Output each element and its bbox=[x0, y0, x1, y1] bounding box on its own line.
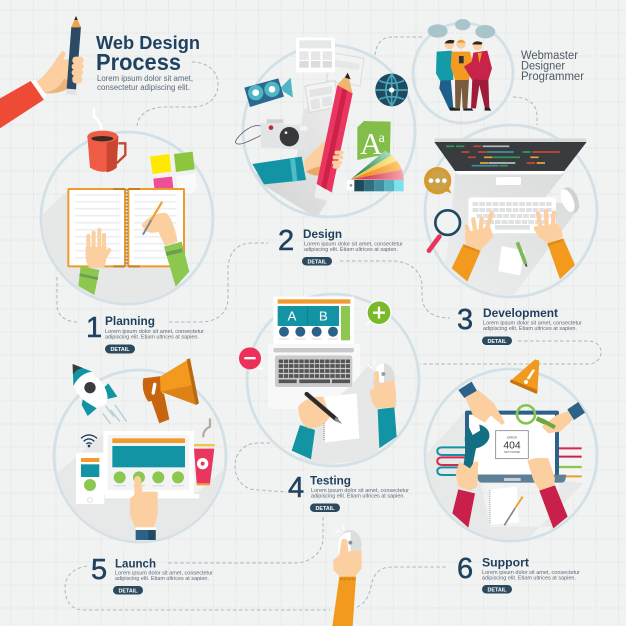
team labels: Programmer bbox=[521, 71, 584, 83]
hand holding big pencil bbox=[252, 73, 353, 202]
label: step 4 testing: adipiscing elit. Etiam ultrices at sapien. bbox=[311, 494, 405, 500]
title: Process bbox=[96, 49, 181, 75]
label: step 6 support: 6 bbox=[457, 553, 473, 585]
right hand with pen bbox=[142, 203, 189, 287]
notebook bbox=[68, 189, 184, 266]
label: step 5 launch: Launch bbox=[115, 556, 156, 570]
label: step 1 planning: DETAIL bbox=[110, 347, 130, 353]
icon: drink cup bbox=[194, 418, 215, 485]
panel: team bbox=[413, 19, 584, 123]
icon: minus bubble bbox=[239, 347, 263, 370]
panel: support illustration bbox=[425, 359, 597, 547]
icon: colour swatch fan bbox=[347, 151, 404, 191]
panel: design illustration bbox=[235, 37, 415, 218]
label: step 2 design: Lorem ipsum dolor sit amet, consectetur bbox=[304, 242, 403, 248]
bottom hand with mouse bbox=[332, 525, 362, 626]
wireframe cards bbox=[296, 37, 364, 113]
label: step 6 support: Lorem ipsum dolor sit amet, consectetur bbox=[482, 570, 580, 576]
icon: magnifier bbox=[429, 210, 460, 251]
icon: traffic cone bbox=[510, 359, 539, 394]
title: consectetur adipiscing elit. bbox=[97, 82, 190, 92]
title bbox=[96, 33, 200, 92]
dashed connectors bbox=[57, 37, 601, 610]
icon: speech bubbles bbox=[428, 19, 495, 38]
label: step 3 development: Lorem ipsum dolor sit amet, consectetur bbox=[483, 320, 582, 326]
label: step 2 design: adipiscing elit. Etiam ultrices at sapien. bbox=[304, 247, 398, 253]
paper and pen hand bbox=[292, 393, 359, 459]
label: step 2 design: 2 bbox=[278, 225, 294, 257]
right hand on laptop bbox=[527, 458, 568, 528]
panel: launch illustration bbox=[53, 358, 227, 550]
A/B test screen: A bbox=[288, 309, 297, 324]
icon: photo camera bbox=[235, 119, 307, 150]
mouse hand bbox=[367, 359, 397, 448]
label: step 5 launch: DETAIL bbox=[118, 588, 138, 594]
label: step 4 testing: 4 bbox=[288, 472, 304, 504]
title: Web Design bbox=[96, 33, 200, 53]
panel: development illustration bbox=[424, 125, 597, 300]
A/B test screen: B bbox=[319, 309, 328, 324]
pointing hand top-left bbox=[458, 382, 505, 425]
pointing hand bbox=[130, 476, 158, 540]
label: step 3 development: 3 bbox=[457, 304, 473, 336]
magnifier and hand bbox=[517, 402, 585, 433]
title hand with pencil bbox=[0, 16, 84, 128]
panel: testing illustration bbox=[239, 294, 419, 467]
monitor with code bbox=[434, 138, 587, 185]
label: step 3 development bbox=[457, 304, 582, 345]
A/B test screen bbox=[273, 297, 354, 344]
label: step 1 planning bbox=[86, 312, 204, 354]
dashboard screen bbox=[103, 431, 199, 498]
laptop with 404 error: NOT FOUND bbox=[504, 450, 520, 454]
icon: video camera bbox=[244, 78, 293, 107]
icon: font document: a bbox=[379, 131, 386, 146]
label: step 5 launch bbox=[91, 554, 213, 594]
keyboard bbox=[273, 348, 354, 387]
stacks of books bbox=[437, 447, 582, 476]
team labels bbox=[521, 50, 584, 83]
notepad and pen bbox=[490, 487, 523, 525]
label: step 1 planning: 1 bbox=[86, 312, 102, 344]
title: Lorem ipsum dolor sit amet, bbox=[97, 73, 193, 83]
label: step 6 support: adipiscing elit. Etiam ultrices at sapien. bbox=[482, 576, 576, 582]
label: step 4 testing: Testing bbox=[310, 474, 351, 488]
left hand bbox=[78, 230, 109, 295]
label: step 5 launch: Lorem ipsum dolor sit amet, consectetur bbox=[115, 570, 213, 576]
label: step 2 design bbox=[278, 225, 403, 266]
label: step 4 testing: Lorem ipsum dolor sit amet, consectetur bbox=[311, 488, 409, 494]
icon: plus bubble bbox=[365, 300, 392, 325]
keyboard, mouse and paper bbox=[468, 185, 582, 275]
label: step 2 design: Design bbox=[303, 227, 342, 241]
label: step 3 development: Development bbox=[483, 306, 558, 320]
phone bbox=[76, 453, 104, 504]
icon: wifi bbox=[81, 435, 97, 447]
label: step 4 testing bbox=[288, 472, 409, 512]
label: step 5 launch: adipiscing elit. Etiam ultrices at sapien. bbox=[115, 576, 209, 582]
laptop with 404 error bbox=[465, 411, 566, 483]
icon: coffee mug bbox=[87, 108, 125, 172]
label: step 1 planning: Lorem ipsum dolor sit amet, consectetur bbox=[105, 329, 204, 335]
label: step 5 launch: 5 bbox=[91, 554, 107, 586]
wrench and hand bbox=[452, 424, 489, 528]
label: step 1 planning: Planning bbox=[105, 314, 155, 328]
icon: chat bubble bbox=[424, 167, 452, 194]
team labels: Webmaster bbox=[521, 50, 578, 62]
label: step 3 development: DETAIL bbox=[487, 339, 507, 345]
icon: font document: A bbox=[360, 127, 382, 161]
label: step 6 support: Support bbox=[482, 556, 529, 570]
team labels: Designer bbox=[521, 60, 565, 72]
icon: three people bbox=[436, 39, 492, 111]
label: step 6 support bbox=[457, 553, 580, 594]
label: step 2 design: DETAIL bbox=[307, 259, 327, 265]
hands typing bbox=[452, 211, 575, 282]
label: step 3 development: adipiscing elit. Etiam ultrices at sapien. bbox=[483, 326, 577, 332]
icon: rocket bbox=[66, 364, 127, 424]
laptop with 404 error: ERROR bbox=[507, 435, 517, 439]
icon: megaphone bbox=[143, 358, 199, 423]
icon: font document bbox=[357, 121, 391, 161]
label: step 1 planning: adipiscing elit. Etiam ultrices at sapien. bbox=[105, 334, 199, 340]
label: step 6 support: DETAIL bbox=[487, 587, 507, 593]
panel: planning illustration bbox=[37, 108, 213, 310]
icon: sticky notes bbox=[150, 152, 197, 193]
icon: globe bbox=[375, 74, 408, 106]
laptop with 404 error: 404 bbox=[503, 441, 521, 452]
label: step 4 testing: DETAIL bbox=[315, 506, 335, 512]
